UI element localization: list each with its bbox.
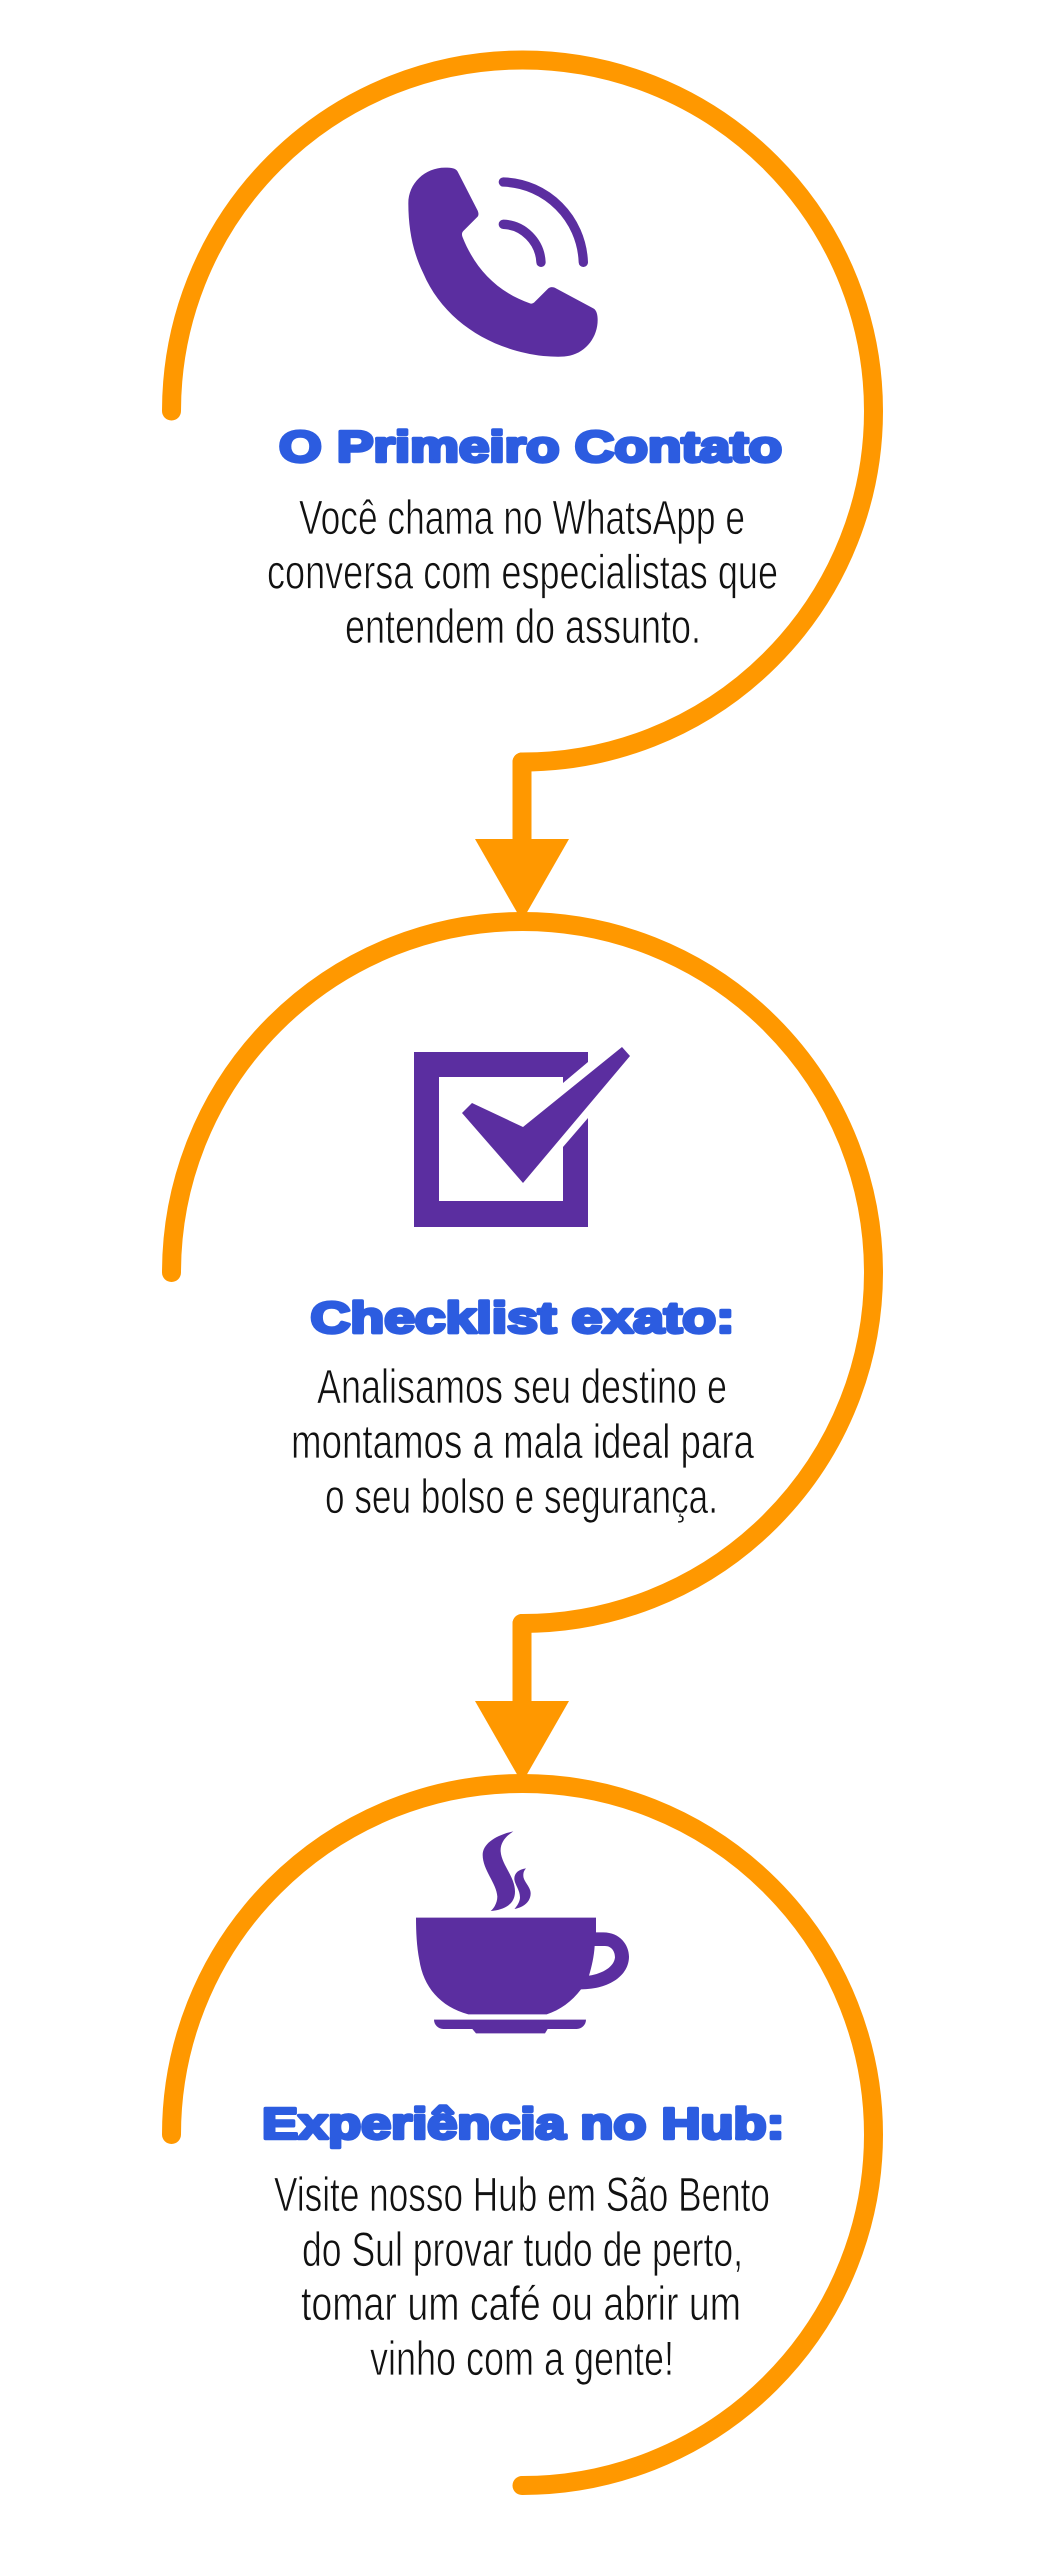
text block: step 3 description: tomar um café ou abrir um xyxy=(301,2278,741,2331)
heading: Checklist exato: Checklist exato: xyxy=(310,1294,734,1342)
text block: step 1 description xyxy=(267,492,778,654)
text block: step 3 description: vinho com a gente! xyxy=(370,2333,674,2386)
circular arc 3 xyxy=(172,1784,874,2486)
panel: step 1, first contact xyxy=(172,60,874,762)
arrow: step 1 to step 2 xyxy=(475,762,569,921)
circular arc 2 xyxy=(172,922,874,1624)
text block: step 2 description: Analisamos seu destino e xyxy=(317,1361,727,1414)
icon: coffee cup xyxy=(416,1831,629,2033)
panel: step 2, exact checklist xyxy=(172,922,874,1624)
text block: step 3 description: do Sul provar tudo de perto, xyxy=(302,2224,743,2277)
panel: step 3, hub experience xyxy=(172,1784,874,2486)
text block: step 2 description: o seu bolso e segurança. xyxy=(325,1471,718,1524)
circular arc 1 xyxy=(172,60,874,762)
text block: step 2 description: montamos a mala ideal para xyxy=(291,1416,754,1469)
text block: step 2 description xyxy=(291,1361,754,1524)
text block: step 3 description xyxy=(274,2169,770,2386)
text block: step 1 description: entendem do assunto. xyxy=(345,601,701,654)
heading: O Primeiro Contato: O Primeiro Contato xyxy=(279,422,782,472)
text block: step 1 description: Você chama no WhatsApp e xyxy=(299,492,745,545)
arrow: step 2 to step 3 xyxy=(475,1624,569,1783)
text block: step 3 description: Visite nosso Hub em São Bento xyxy=(274,2169,770,2222)
icon: checkbox xyxy=(414,1047,630,1227)
icon: telephone xyxy=(408,168,598,357)
heading: Experiência no Hub: Experiência no Hub: xyxy=(262,2100,784,2148)
text block: step 1 description: conversa com especialistas que xyxy=(267,546,778,600)
